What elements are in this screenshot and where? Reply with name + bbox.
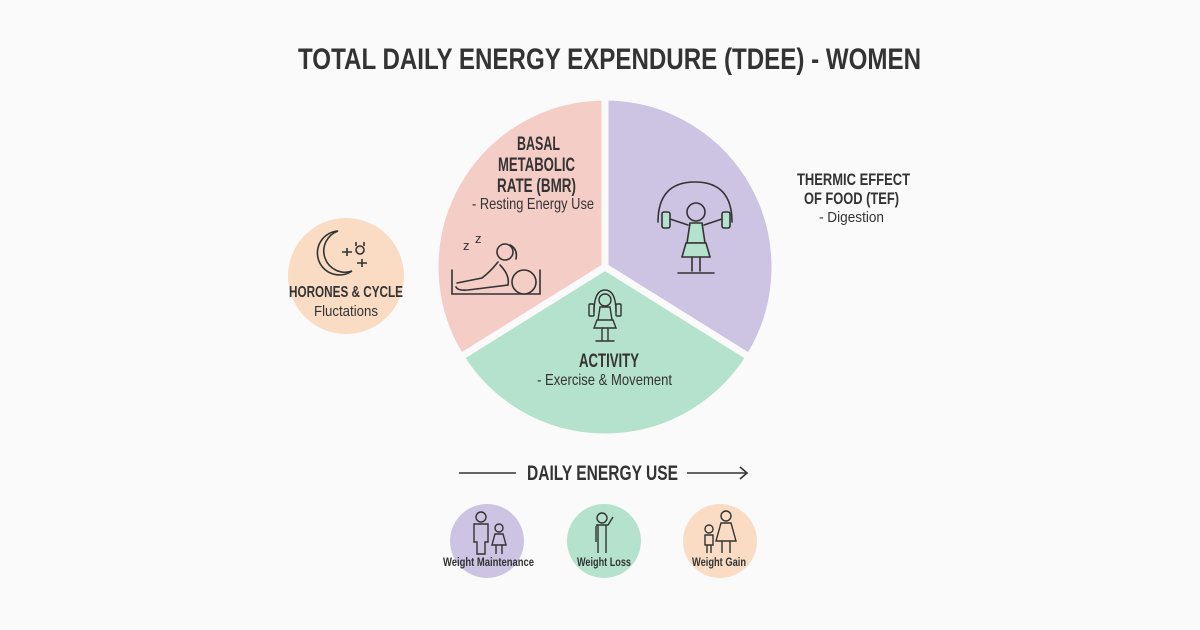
BMR label [497, 134, 576, 197]
TEF label: - Digestion [819, 209, 884, 226]
activity label: ACTIVITY [579, 351, 639, 372]
icon: sleeping woman: z [475, 231, 482, 246]
icon: small woman with weights [589, 290, 621, 341]
hormones circle: Fluctations [314, 303, 378, 320]
TEF label: OF FOOD (TEF) [804, 189, 899, 208]
weight maintenance [443, 504, 534, 578]
pie chart [435, 97, 775, 437]
weight maintenance: Weight Maintenance [443, 555, 534, 569]
segment: TEF [605, 97, 775, 357]
weight loss: Weight Loss [577, 555, 631, 569]
daily energy use arrow: DAILY ENERGY USE [527, 462, 678, 485]
hormones circle [288, 218, 404, 334]
icon: sleeping woman [452, 231, 540, 294]
BMR label: BASAL [517, 134, 560, 155]
segment: activity [461, 267, 749, 437]
hormones circle: HORONES & CYCLE [289, 284, 403, 301]
TEF label [797, 170, 910, 226]
icon: sleeping woman: z [463, 238, 470, 253]
weight gain [683, 504, 757, 578]
icon: moon [317, 231, 367, 275]
segment: BMR [435, 97, 605, 357]
BMR label: METABOLIC [498, 155, 575, 176]
BMR label: RATE (BMR) [497, 176, 576, 197]
icon: woman with jump rope and dumbbells [658, 182, 732, 273]
weight loss [567, 504, 641, 578]
weight gain: Weight Gain [692, 555, 746, 569]
title: TOTAL DAILY ENERGY EXPENDURE (TDEE) - WOMEN [298, 43, 921, 76]
activity sublabel: - Exercise & Movement [537, 372, 672, 389]
BMR sublabel: - Resting Energy Use [472, 196, 594, 213]
TEF label: THERMIC EFFECT [797, 170, 910, 189]
